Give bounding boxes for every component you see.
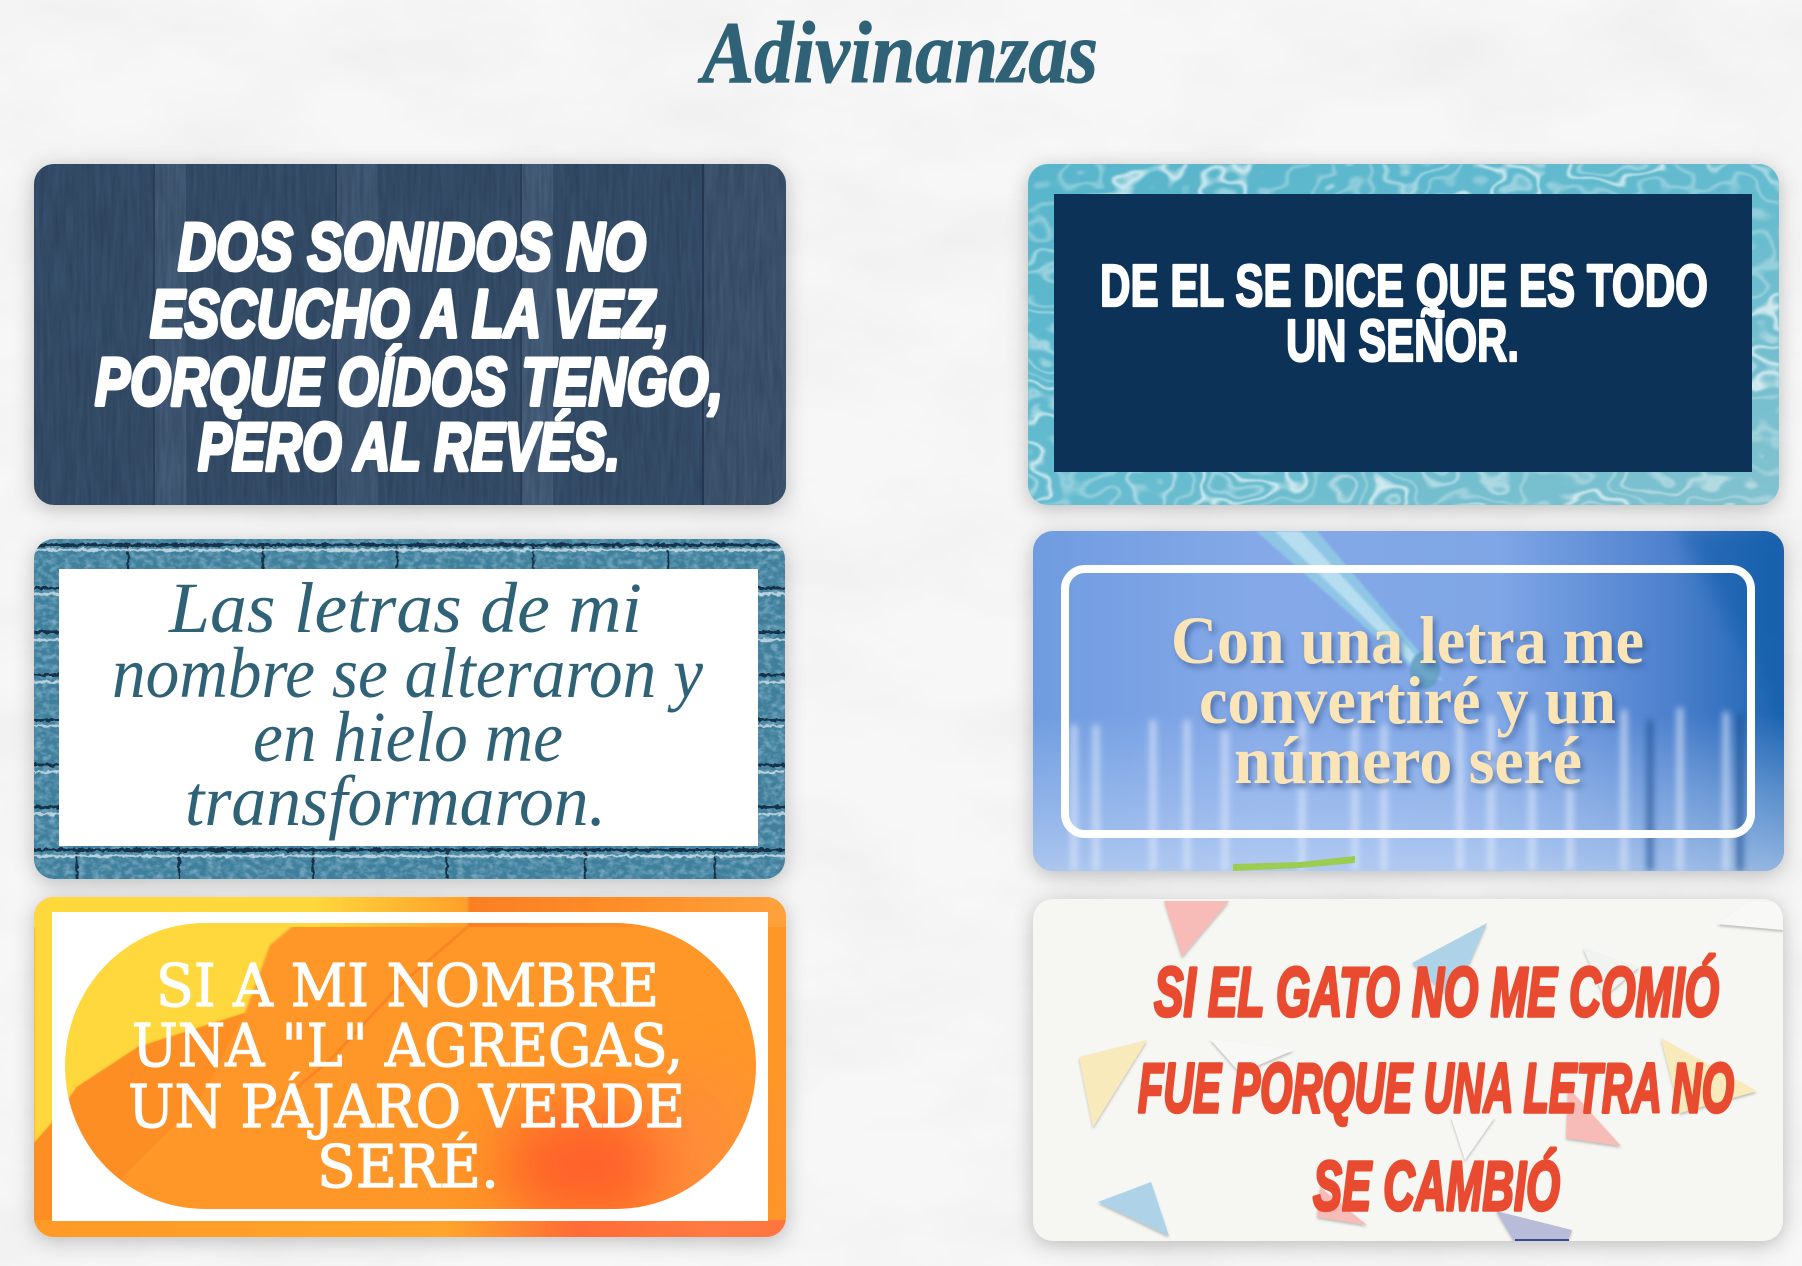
riddle 3 text	[112, 568, 703, 841]
riddle 3 text: Las letras de mi	[168, 568, 642, 648]
riddle 5 text: UNA "L" AGREGAS,	[132, 1011, 683, 1080]
panel: riddle 3, brick wall	[34, 539, 785, 879]
riddle 3 text: transformaron.	[185, 761, 606, 841]
pipette	[1256, 531, 1443, 689]
panel: riddle 5, orange watercolor	[34, 897, 786, 1237]
panel: riddle 1, wood planks	[34, 164, 786, 505]
laboratory background	[1033, 531, 1784, 871]
riddle 2 text: UN SEÑOR.	[1286, 308, 1519, 374]
green liquid	[1233, 856, 1355, 871]
panel: riddle 6, paper triangles	[1033, 899, 1783, 1241]
riddle 6 text	[1138, 953, 1734, 1225]
riddle 1 text: DOS SONIDOS NO	[178, 209, 646, 285]
test tubes	[1074, 708, 1740, 871]
riddle 4 text	[1171, 602, 1644, 798]
orange watercolor background	[34, 897, 786, 1237]
riddle 5 text: UN PÁJARO VERDE	[128, 1071, 685, 1141]
riddle 1 text: PORQUE OÍDOS TENGO,	[95, 344, 723, 420]
confetti triangle background	[1033, 899, 1783, 1241]
riddle 3 text: en hielo me	[253, 697, 563, 777]
riddle 4 text: convertiré y un	[1199, 662, 1616, 738]
white rounded frame	[1065, 569, 1751, 834]
riddle 6 text: SE CAMBIÓ	[1313, 1147, 1560, 1225]
wood plank background	[34, 164, 786, 505]
navy text box	[1054, 194, 1752, 472]
riddle 3 text: nombre se alteraron y	[112, 633, 703, 713]
riddle 4 text: número seré	[1234, 722, 1582, 798]
riddle 5 text: SI A MI NOMBRE	[156, 951, 659, 1020]
riddle 1 text: ESCUCHO A LA VEZ,	[150, 276, 669, 352]
white frame with rounded window	[52, 912, 768, 1221]
white text box	[59, 569, 758, 846]
brick wall background	[34, 539, 785, 879]
water background	[1028, 164, 1779, 505]
panel: riddle 4, test tubes	[1033, 531, 1784, 871]
riddle 5 text: SERÉ.	[317, 1131, 499, 1201]
riddle 1 text	[95, 209, 723, 485]
riddle 4 text: Con una letra me	[1171, 602, 1644, 678]
panel: riddle 2, water background	[1028, 164, 1779, 505]
riddle 1 text: PERO AL REVÉS.	[198, 409, 620, 485]
riddle 2 text	[1100, 253, 1708, 374]
riddle 5 text	[128, 951, 685, 1201]
title: Adivinanzas	[698, 5, 1098, 102]
